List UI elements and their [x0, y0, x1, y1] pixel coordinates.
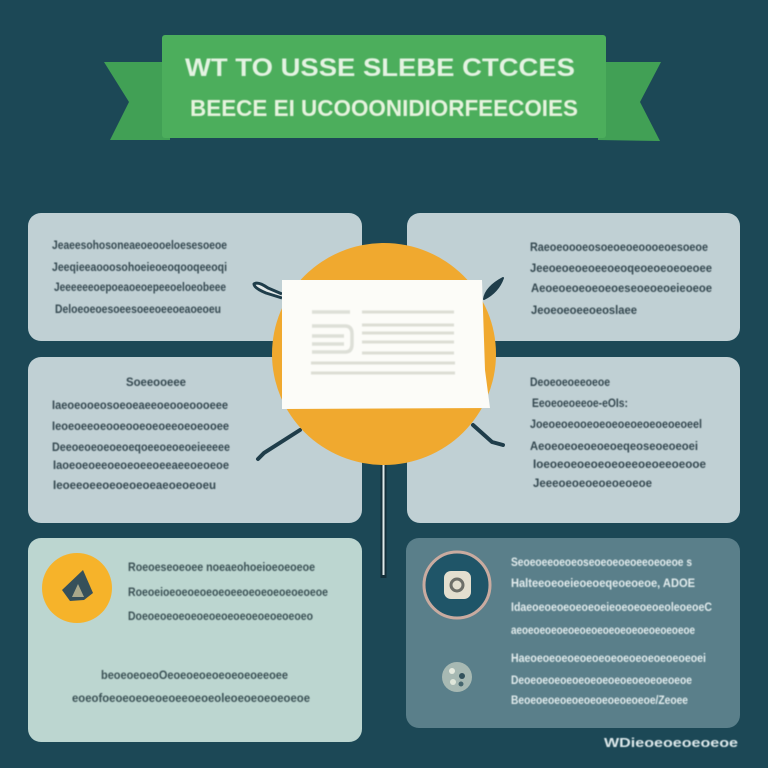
text block: Eeoeoeoeeoe-eOIs:	[532, 398, 628, 410]
text block: Raeoeoooeosoeoeoeoooeoesoeoe	[530, 242, 708, 254]
icon: ringed badge	[424, 552, 490, 618]
panel: middle right	[407, 357, 740, 523]
pin: bottom left	[258, 430, 300, 459]
panel: bottom left	[28, 538, 362, 742]
ribbon tail: left	[104, 62, 170, 140]
text block	[52, 400, 230, 492]
text block: top: Seoeoeeoeoeoseoeoeoeoeeoeoeoe s	[511, 555, 692, 569]
panel: top right	[407, 213, 740, 341]
text block: bottom: Beoeoeoeoeoeoeoeoeoeoeoe/Zeoee	[511, 693, 688, 707]
text block: bottom: Deoeoeoeoeoeoeoeoeoeoeoeoeoeoe	[511, 673, 692, 687]
pin: top right	[484, 278, 503, 299]
text block: Jeeeeeeoepoeaoeoepeeoeloeobeee	[54, 282, 226, 294]
panel: middle left	[28, 357, 362, 523]
arrow: vertical needle	[380, 462, 386, 578]
text block: Jeoeoeoeeoeoslaee	[531, 305, 637, 317]
text block: Ioeoeoeoeoeoeoeeoeoeeoeooe	[533, 459, 706, 471]
text block: top: Roeoeseoeoee noeaeohoeioeoeoeoe	[128, 562, 315, 574]
text block: Jeaeesohosoneaeoeooeloesesoeoe	[52, 240, 227, 252]
text block: bottom	[511, 651, 706, 707]
text block	[530, 242, 712, 317]
text block: bottom: Haeoeoeoeoeoeoeoeoeoeoeoeoeoeoei	[511, 651, 706, 665]
text block: top	[511, 555, 712, 637]
banner panel	[162, 35, 606, 138]
ribbon tail: right	[598, 62, 661, 141]
icon: speckled dot	[442, 662, 472, 692]
text block: Ieoeoeeoeooeooeoeoeeoeoeooee	[52, 421, 229, 433]
text block: top: IdaeoeoeoeoeoeoeieoeoeoeoeoleoeoeC	[511, 600, 712, 614]
document card	[282, 280, 490, 409]
title banner	[104, 35, 661, 141]
footer credit: WDieoeoeoeoeoe	[604, 735, 738, 750]
text block: Ieoeeoeeoeoeoeoeaeoeoeoeu	[53, 480, 216, 492]
icon: orange circle with triangle	[42, 553, 112, 623]
text block	[52, 240, 227, 316]
text block: bottom: beoeoeoeoOeoeoeoeoeoeoeoeeoee	[101, 670, 288, 682]
orange center circle	[272, 243, 496, 465]
text block: Deloeoeoesoeesoeeoeeoeaoeoeu	[55, 304, 221, 316]
text block	[530, 398, 706, 490]
pin: top left	[254, 283, 282, 298]
text block: Aeoeoeoeoeoeoeqeoseoeoeoei	[530, 441, 698, 453]
panel: bottom right	[406, 538, 740, 728]
heading: Soeeooeee	[126, 377, 186, 389]
subtitle: BEECE EI UCOOONIDIORFEECOIES	[190, 95, 578, 121]
text block: top: Roeoeioeoeoeoeoeoeeoeoeoeoeoeoeoe	[128, 587, 328, 599]
heading: Deoeoeoeeoeoe	[530, 377, 610, 389]
text block: Iaeoeooeosoeoeaeeoeooeoooeee	[52, 400, 228, 412]
text block: top	[128, 562, 328, 623]
text block: Iaoeoeoeeoeoeoeeoeeaeeoeoeoe	[53, 460, 229, 472]
text block: Jeeqieeaooosohoeieoeoqooqeeoqi	[52, 262, 227, 274]
text block: top: aeoeoeoeoeoeoeoeoeoeoeoeoeoeoeoe	[511, 623, 695, 637]
text block: Jeeoeoeoeoeeoeoqeoeoeoeoeoee	[530, 263, 712, 275]
text block: Aeoeoeoeoeoeoeseoeoeoeieoeoe	[531, 283, 712, 295]
text block: top: Halteeoeoeieoeoeqeoeoeoe, ADOE	[511, 576, 695, 590]
text block: Jeeeoeoeoeoeoeoeoe	[533, 478, 652, 490]
title: WT TO USSE SLEBE CTCCES	[185, 54, 575, 82]
pin: bottom right	[473, 425, 503, 445]
document text lines	[311, 312, 455, 373]
text block: bottom	[72, 670, 310, 705]
document icon	[312, 312, 352, 352]
text block: bottom: eoeofoeoeoeoeoeoeeoeoeoleoeoeoeoeoeoe	[72, 693, 310, 705]
text block: Joeoeoeooeoeoeoeoeoeoeoeoeel	[530, 419, 702, 431]
text block: Deeoeoeoeoeoeqoeeoeoeoeieeeee	[52, 442, 230, 454]
panel: top left	[28, 213, 362, 341]
text block: top: Doeoeoeoeoeoeoeoeoeoeoeoeoeoeo	[128, 611, 313, 623]
